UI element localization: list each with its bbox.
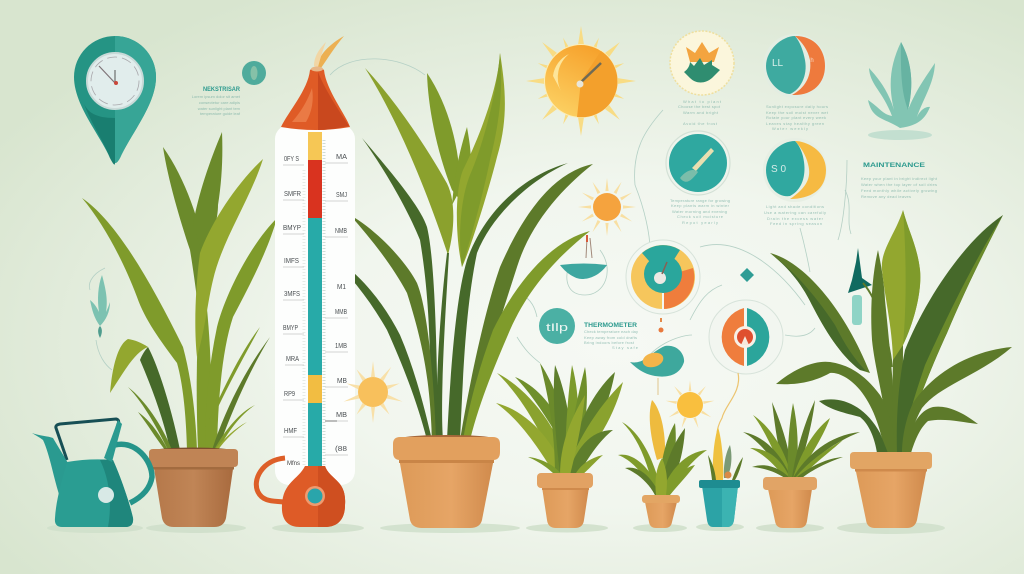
pot: small spiky plant [537, 473, 593, 528]
half pie gauge [709, 300, 783, 374]
connector lines [89, 59, 851, 370]
pot: corn plant [642, 495, 680, 528]
text block: middle note: Stay safe [612, 345, 639, 350]
text block: under teal badge: Temperature range for growing [670, 198, 730, 203]
text block: under sun badge: What to plant [683, 99, 722, 104]
badge: teal orange pie: h [810, 58, 814, 64]
text block: under yellow badge: Feed in spring season [770, 221, 822, 226]
text block: middle note: Keep away from cold drafts [584, 335, 637, 340]
badge: teal yellow pie: S 0 [771, 164, 786, 175]
thermometer flame tip [314, 36, 344, 68]
thermometer left labels: SMFR [284, 191, 301, 198]
text block: right note: Remove any dead leaves [861, 194, 911, 199]
plant: small spiky plant [496, 363, 623, 475]
thermometer left labels: 0FY S [284, 156, 299, 163]
thermometer colour scale [304, 132, 324, 466]
thermometer left labels: BMYP [283, 325, 298, 332]
text block: top left note: Lorem ipsum dolor sit amet [192, 94, 241, 99]
can top handle [56, 419, 119, 460]
pot: teal [699, 480, 740, 527]
text block: right note: Keep your plant in bright indirect light [861, 176, 938, 181]
text block: under pie badge [766, 104, 829, 131]
thermometer cap [281, 66, 350, 130]
text block: under yellow badge: Drain the excess water [767, 216, 824, 221]
thermometer orange bulb and handle [256, 458, 345, 527]
badge: plant and sun [670, 31, 734, 95]
icon: teal bird [630, 346, 684, 395]
icon: teal diamond [740, 268, 754, 282]
text block: middle note: THERMOMETER [584, 322, 637, 329]
plant: corn plant in small pot [618, 400, 707, 495]
icon: map pin with clock [74, 36, 156, 165]
pot: left plant [149, 448, 238, 527]
thermometer left labels: MRA [286, 356, 299, 363]
thermometer right labels: SMJ [336, 192, 347, 199]
thermometer right labels: 1MB [335, 343, 347, 350]
text block: under teal badge: Check soil moisture [677, 214, 724, 219]
text block: middle note [584, 322, 639, 350]
donut gauge [626, 240, 700, 314]
text block: under pie badge: Leaves stay healthy green [766, 121, 824, 126]
plant: left tall plant [82, 132, 277, 450]
plant: centre tall plant [327, 53, 593, 440]
thermometer left labels [283, 156, 304, 437]
thermometer right labels: MB [336, 412, 347, 419]
text block: top left note [192, 86, 241, 116]
text block: under pie badge: Keep the soil moist never wet [766, 110, 829, 115]
watering can [32, 419, 152, 527]
text block: right note: MAINTENANCE [863, 162, 926, 169]
thermometer right labels: M1 [337, 284, 346, 291]
text block: under sun badge: Warm and bright [683, 110, 719, 115]
text block: under sun badge: Choose the best spot [678, 104, 721, 109]
icon: small teal plant sprig [90, 275, 110, 338]
text block: under teal badge: Repot yearly [682, 220, 718, 225]
can body [55, 420, 133, 527]
icon: small teal badge [242, 61, 266, 85]
text block: middle note: Bring indoors before frost [584, 340, 635, 345]
sun: lower small sun [665, 380, 715, 429]
pot: small dark plant [763, 477, 817, 528]
badge: teal yellow pie [763, 138, 827, 202]
text block: under teal badge: Water morning and evening [672, 209, 727, 214]
text block: under teal badge: Keep plants warm in winter [671, 203, 730, 208]
text block: under yellow badge: Use a watering can carefully [764, 210, 826, 215]
sun: small sun beside thermometer [343, 361, 403, 423]
sun: large gauge sun [526, 26, 636, 136]
plant: corn in teal pot [708, 427, 743, 480]
text block: under sun badge: Avoid the frost [683, 121, 718, 126]
thermometer right labels: MMB [335, 309, 347, 316]
text block: top left note: consectetur care adipis [199, 100, 240, 105]
plant: small dark spiky plant [743, 400, 860, 478]
text block: top left note: temperature guide leaf [200, 111, 241, 116]
text block: under yellow badge [764, 204, 826, 226]
text block: right note: Feed monthly while actively growing [861, 188, 937, 193]
thermometer left labels: HMF [284, 428, 297, 435]
text block: under pie badge: Rotate your plant every week [766, 115, 826, 120]
badge: teal tool [666, 131, 730, 195]
badge: teal orange pie [763, 34, 827, 98]
text block: under teal badge [670, 198, 730, 225]
icon: aqua plant emblem [868, 42, 935, 140]
text block: top left note: water sunlight plant tem [198, 106, 241, 111]
icon: small markers [658, 318, 664, 332]
text block: under pie badge: Sunlight exposure daily hours [766, 104, 828, 109]
text block: under pie badge: Water weekly [772, 126, 808, 131]
thermometer left labels: 3MFS [284, 291, 300, 298]
icon: teal bowl with stem [560, 235, 607, 279]
text block: right note [838, 160, 938, 240]
thermometer left labels: BMYP [283, 225, 301, 232]
badge: small teal circle [539, 308, 575, 344]
badge: small teal circle: tIlp [546, 322, 568, 334]
plant: large right plant [770, 210, 1012, 453]
thermometer right labels: MB [337, 378, 347, 385]
text block: under yellow badge: Light and shade conditions [766, 204, 824, 209]
thermometer white tube [275, 125, 355, 485]
icon: dark teal plug and aqua tube [848, 248, 872, 325]
dotted curl above corn [717, 373, 739, 435]
ground shadows [47, 522, 945, 534]
can spout [32, 433, 73, 497]
thermometer left labels: IMFS [284, 258, 299, 265]
thermometer orange bulb and handle: Mfns [287, 461, 300, 467]
thermometer right labels: MA [336, 154, 347, 161]
text block: top left note: NEKSTRISAR [203, 86, 240, 93]
pot: large right plant [850, 452, 932, 528]
sun: small orange sun [578, 178, 636, 236]
thermometer right labels: NMB [335, 228, 347, 235]
thermometer left labels: RP9 [284, 391, 295, 398]
pot: centre plant [393, 435, 500, 528]
badge: teal orange pie: LL [772, 58, 784, 69]
thermometer [256, 36, 355, 527]
thermometer right labels [325, 154, 348, 455]
text block: under sun badge [678, 99, 722, 126]
thermometer right labels: (88 [335, 446, 347, 453]
text block: middle note: Check temperature each day [584, 329, 638, 334]
text block: right note: Water when the top layer of soil dries [861, 182, 937, 187]
can right handle [115, 444, 152, 503]
